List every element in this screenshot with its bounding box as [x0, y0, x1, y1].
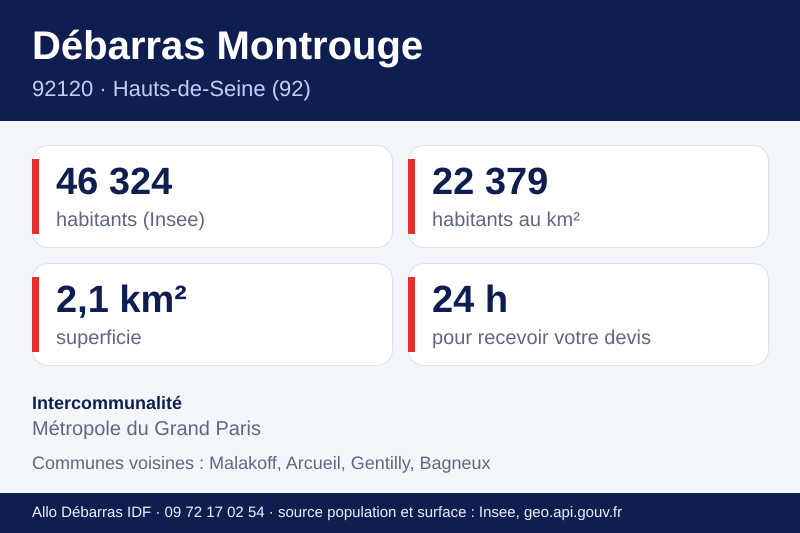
value: 22 379 [432, 161, 548, 203]
footer band [0, 493, 800, 533]
value: 46 324 [56, 161, 172, 203]
label: pour recevoir votre devis [432, 327, 651, 349]
neighbouring communes: Communes voisines : Malakoff, Arcueil, Gentilly, Bagneux [32, 453, 491, 473]
accent bar [408, 277, 415, 352]
stat card: quote delay [408, 263, 769, 366]
title: Débarras Montrouge [32, 24, 423, 68]
footer text: Allo Débarras IDF · 09 72 17 02 54 · source population et surface : Insee, geo.api.gouv.fr [32, 504, 622, 521]
value: 2,1 km² [56, 279, 187, 321]
stat card: area [32, 263, 393, 366]
accent bar [408, 159, 415, 234]
stat card: density [408, 145, 769, 248]
intercommunality name: Métropole du Grand Paris [32, 418, 261, 440]
value: 24 h [432, 279, 508, 321]
accent bar [32, 277, 39, 352]
intercommunality heading: Intercommunalité [32, 393, 182, 413]
header band [0, 0, 800, 121]
label: superficie [56, 327, 142, 349]
accent bar [32, 159, 39, 234]
label: habitants (Insee) [56, 209, 205, 231]
stat card: population [32, 145, 393, 248]
label: habitants au km² [432, 209, 580, 231]
subtitle: 92120 · Hauts-de-Seine (92) [32, 76, 311, 101]
